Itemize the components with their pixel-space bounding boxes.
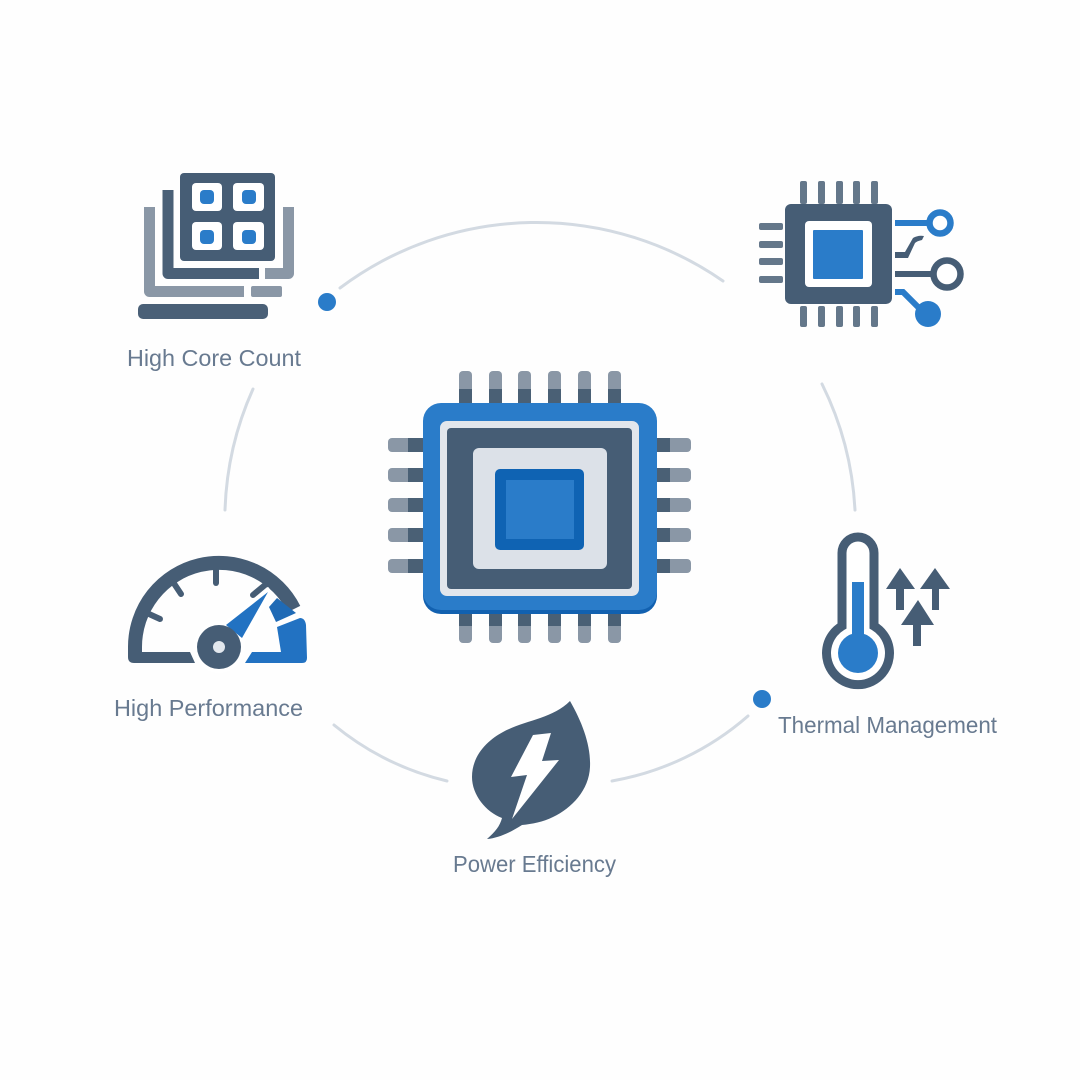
central processor chip: [388, 371, 691, 643]
label: high performance: High Performance: [114, 695, 303, 721]
icon: speedometer gauge: [128, 563, 307, 673]
label: high core count: High Core Count: [127, 345, 302, 371]
accent dot: lower right: [753, 690, 771, 708]
accent dot: upper left: [318, 293, 336, 311]
label: power efficiency: Power Efficiency: [453, 851, 616, 877]
icon: high core count stacked cores: [138, 173, 288, 319]
icon: thermometer with rising arrows: [826, 537, 950, 685]
icon: circuit chip: [759, 181, 960, 327]
connecting ring arcs: [225, 222, 855, 781]
label: thermal management: Thermal Management: [778, 712, 998, 738]
icon: leaf with lightning bolt: [472, 701, 590, 839]
chip pins: [388, 371, 691, 643]
